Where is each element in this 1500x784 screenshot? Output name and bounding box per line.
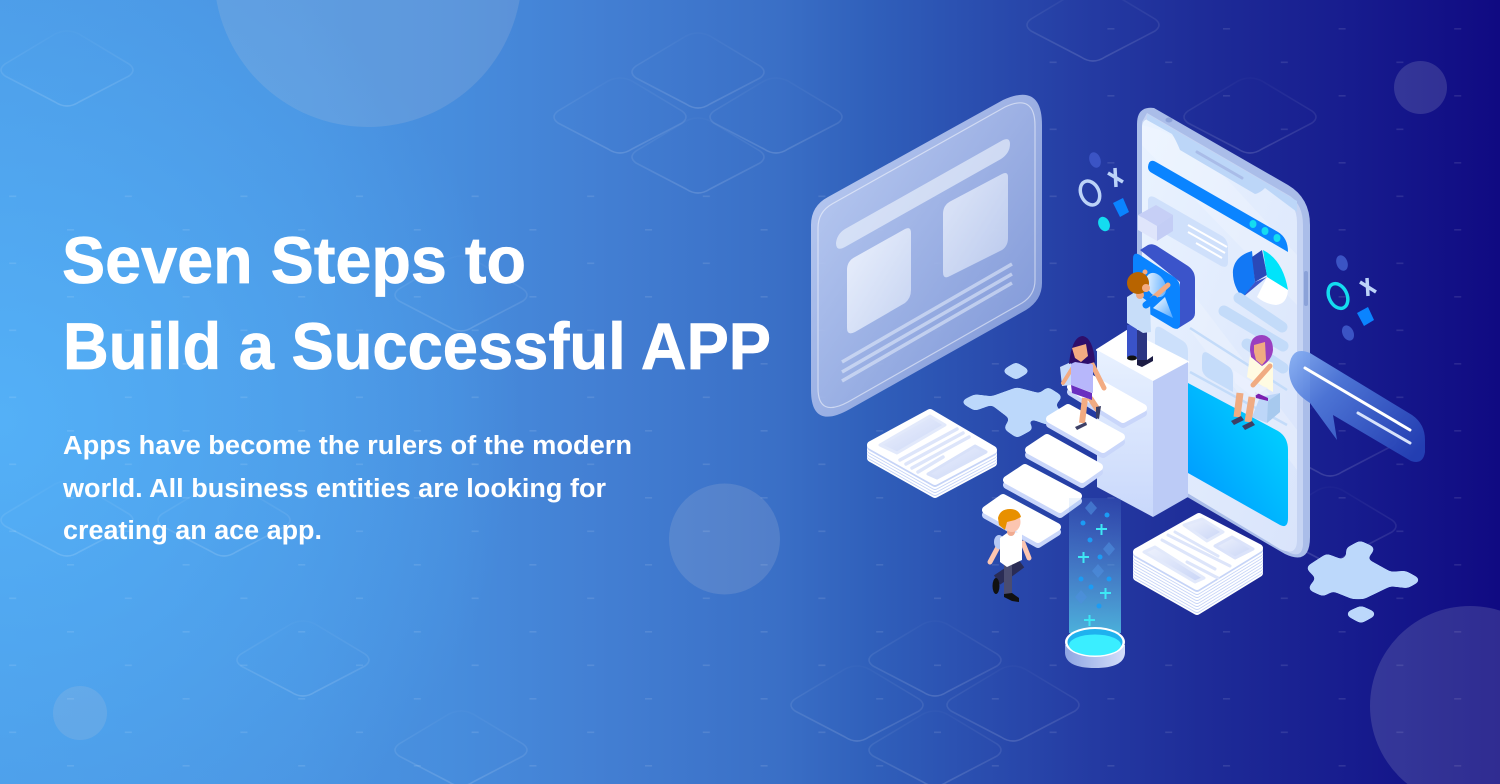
shapes group near phone bbox=[1324, 254, 1376, 343]
notch bbox=[1147, 114, 1297, 212]
description text bbox=[62, 432, 632, 545]
description text: world. All business entities are looking for bbox=[62, 475, 606, 503]
title: Build a Successful APP bbox=[63, 309, 771, 383]
panel image box left bbox=[847, 228, 911, 333]
phone bbox=[1137, 108, 1310, 558]
icon: floating app tile bbox=[1133, 244, 1195, 329]
paper contents bbox=[880, 416, 945, 453]
right puzzle piece bbox=[1310, 544, 1416, 620]
lower cards bbox=[1155, 327, 1233, 392]
light beam with particles bbox=[1069, 498, 1121, 633]
panel header bar bbox=[836, 139, 1010, 249]
power button bbox=[1304, 271, 1308, 306]
shapes group near panel bbox=[1077, 151, 1129, 233]
left puzzle piece bbox=[965, 365, 1065, 435]
person: man at app tile bbox=[1127, 270, 1168, 367]
phone screen bbox=[1142, 119, 1297, 552]
paper stack right bbox=[1137, 517, 1259, 611]
content card bbox=[1148, 196, 1228, 267]
phone header bar bbox=[1148, 161, 1288, 252]
pie chart bbox=[1233, 250, 1288, 305]
stepping slabs bbox=[986, 378, 1143, 544]
thin content lines bbox=[1190, 328, 1287, 425]
pedestal bbox=[1097, 331, 1188, 517]
person: boy walking bbox=[990, 509, 1029, 602]
paper stack left bbox=[871, 413, 993, 494]
person: seated girl with laptop bbox=[1231, 335, 1280, 430]
panel image box right bbox=[943, 173, 1008, 277]
description text: creating an ace app. bbox=[63, 517, 322, 545]
small cube bbox=[1138, 205, 1173, 241]
cyan panel bbox=[1188, 383, 1288, 526]
beam base bbox=[1065, 627, 1125, 668]
floating browser panel bbox=[811, 95, 1042, 417]
paper contents bbox=[1144, 547, 1204, 582]
title bbox=[62, 223, 771, 383]
screen sheen bbox=[1142, 125, 1297, 470]
description text: Apps have become the rulers of the modern bbox=[63, 432, 632, 460]
panel text lines bbox=[842, 264, 1012, 381]
translucent speech bubble bbox=[1289, 351, 1425, 462]
person: walking girl bbox=[1060, 336, 1104, 430]
title: Seven Steps to bbox=[62, 223, 526, 297]
content pills bbox=[1224, 298, 1283, 368]
